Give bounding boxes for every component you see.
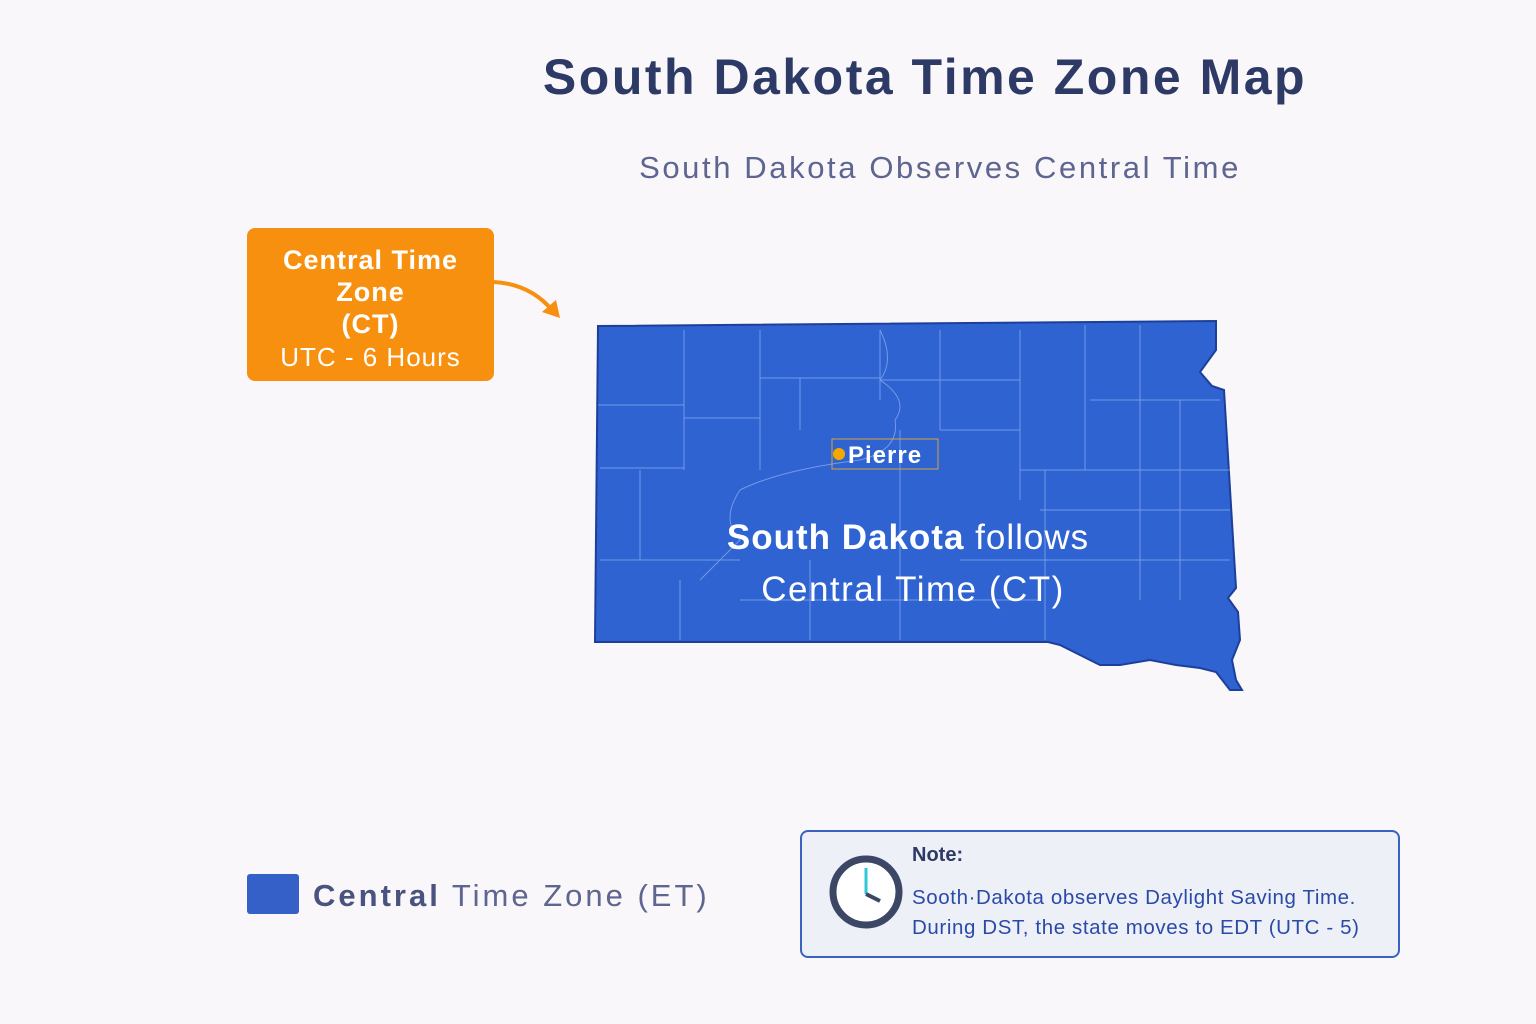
note text: Note: — [912, 844, 963, 866]
callout: central time zone: UTC - 6 Hours — [280, 342, 461, 372]
label: Pierre — [832, 439, 938, 469]
callout: central time zone — [247, 228, 494, 381]
note text: Sooth·Dakota observes Daylight Saving Time. — [912, 886, 1356, 909]
title: South Dakota Time Zone Map — [543, 49, 1307, 105]
arrow: callout to map — [494, 280, 560, 318]
map text — [727, 518, 1089, 609]
note box — [800, 830, 1400, 958]
icon: clock — [830, 856, 902, 928]
note text: During DST, the state moves to EDT (UTC - 5) — [912, 916, 1360, 939]
callout: central time zone: (CT) — [342, 309, 399, 339]
map text: South Dakota follows — [727, 518, 1089, 557]
map text: Central Time (CT) — [761, 570, 1065, 609]
callout: central time zone: Zone — [336, 277, 405, 307]
subtitle: South Dakota Observes Central Time — [639, 150, 1241, 185]
legend: Central Time Zone (ET) — [313, 878, 710, 913]
callout: central time zone: Central Time — [283, 245, 458, 275]
label: Pierre: Pierre — [848, 442, 922, 469]
note text — [912, 844, 1360, 939]
